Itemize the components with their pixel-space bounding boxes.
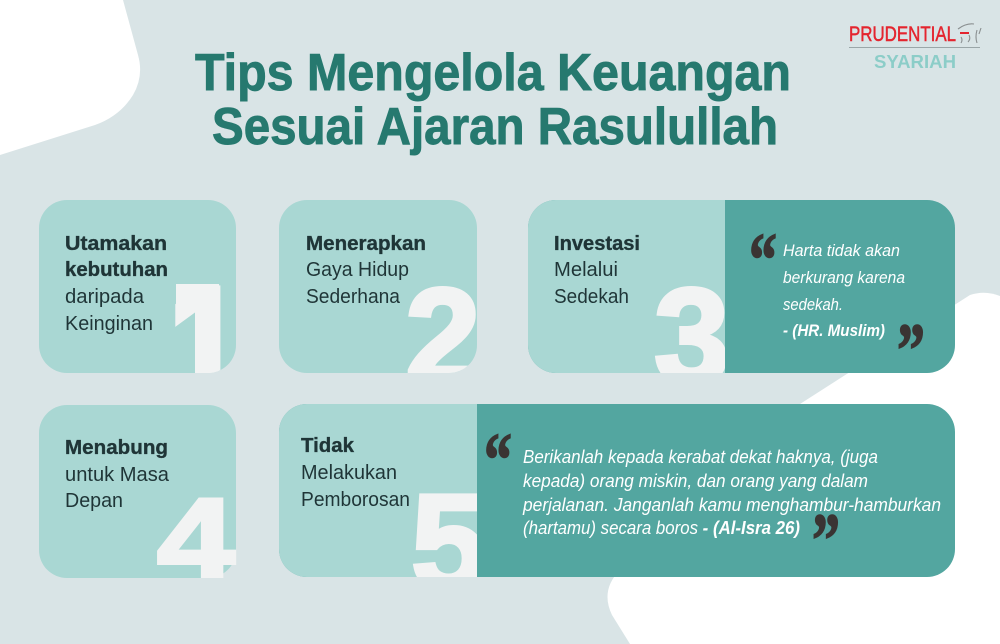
panel: tip 4 bbox=[39, 405, 236, 578]
number 1: 1 bbox=[168, 254, 244, 432]
tip 3 light section bbox=[528, 200, 725, 373]
text: tip 2: Sederhana bbox=[306, 286, 401, 308]
text: tip 2 bbox=[306, 233, 426, 308]
quote text: tip 3: sedekah. bbox=[783, 295, 843, 314]
quote text: tip 3: - (HR. Muslim) bbox=[783, 321, 885, 340]
text: tip 2: Gaya Hidup bbox=[306, 259, 409, 281]
text: tip 2: Menerapkan bbox=[306, 233, 426, 255]
white shape top left bbox=[0, 0, 140, 155]
icon: opening quote: “ bbox=[484, 418, 512, 502]
text: tip 4 bbox=[65, 437, 170, 512]
tip 5 light section bbox=[279, 404, 477, 577]
text: tip 4: Depan bbox=[65, 490, 123, 512]
title bbox=[195, 44, 791, 156]
text: tip 5: Tidak bbox=[301, 435, 355, 457]
number 2: 2 bbox=[405, 260, 481, 412]
quote text: tip 5 bbox=[522, 447, 941, 538]
text: tip 3 bbox=[554, 233, 640, 308]
quote text: tip 3: Harta tidak akan bbox=[783, 241, 900, 260]
number 1 bbox=[175, 284, 220, 373]
text: tip 3: Melalui bbox=[554, 259, 618, 281]
icon: lion sketch bbox=[958, 24, 981, 43]
text: tip 3: Investasi bbox=[554, 233, 640, 255]
number 5: 5 bbox=[411, 466, 487, 618]
quote text: tip 5: (hartamu) secara boros - (Al-Isra 26) bbox=[523, 518, 800, 538]
text: tip 1: kebutuhan bbox=[65, 259, 168, 281]
icon: opening quote: “ bbox=[749, 218, 777, 302]
number 3: 3 bbox=[654, 260, 730, 412]
title: Sesuai Ajaran Rasulullah bbox=[212, 98, 778, 156]
text: tip 1: Keinginan bbox=[65, 313, 153, 335]
text: tip 5 bbox=[301, 435, 410, 511]
text: tip 1 bbox=[65, 233, 168, 335]
panel: tip 1 bbox=[39, 200, 236, 373]
panel: tip 2 bbox=[279, 200, 477, 373]
quote text: tip 3 bbox=[783, 241, 905, 340]
panel: tip 3 bbox=[528, 200, 955, 373]
logo: Prudential Syariah bbox=[849, 23, 981, 72]
quote text: tip 5: Berikanlah kepada kerabat dekat haknya, (juga bbox=[523, 447, 878, 467]
text: tip 5: Melakukan bbox=[301, 462, 397, 484]
text: tip 1: Utamakan bbox=[65, 233, 167, 255]
logo: Prudential Syariah: PRUDENTIAL bbox=[849, 23, 956, 46]
icon: closing quote: ” bbox=[812, 499, 840, 583]
text: tip 5: Pemborosan bbox=[301, 489, 410, 511]
title: Tips Mengelola Keuangan bbox=[195, 44, 791, 102]
text: tip 4: untuk Masa bbox=[65, 464, 170, 486]
quote text: tip 3: berkurang karena bbox=[783, 268, 905, 287]
panel: tip 5 bbox=[279, 404, 955, 577]
text: tip 3: Sedekah bbox=[554, 286, 629, 308]
logo: Prudential Syariah: SYARIAH bbox=[874, 51, 956, 72]
quote text: tip 5: kepada) orang miskin, dan orang yang dalam bbox=[523, 471, 868, 491]
text: tip 1: daripada bbox=[65, 286, 145, 308]
quote text: tip 5: perjalanan. Janganlah kamu menghambur-hamburkan bbox=[522, 495, 941, 515]
text: tip 4: Menabung bbox=[65, 437, 168, 459]
white shape bottom right bbox=[608, 293, 1000, 644]
number 4: 4 bbox=[157, 475, 235, 605]
icon: closing quote: ” bbox=[897, 309, 925, 393]
